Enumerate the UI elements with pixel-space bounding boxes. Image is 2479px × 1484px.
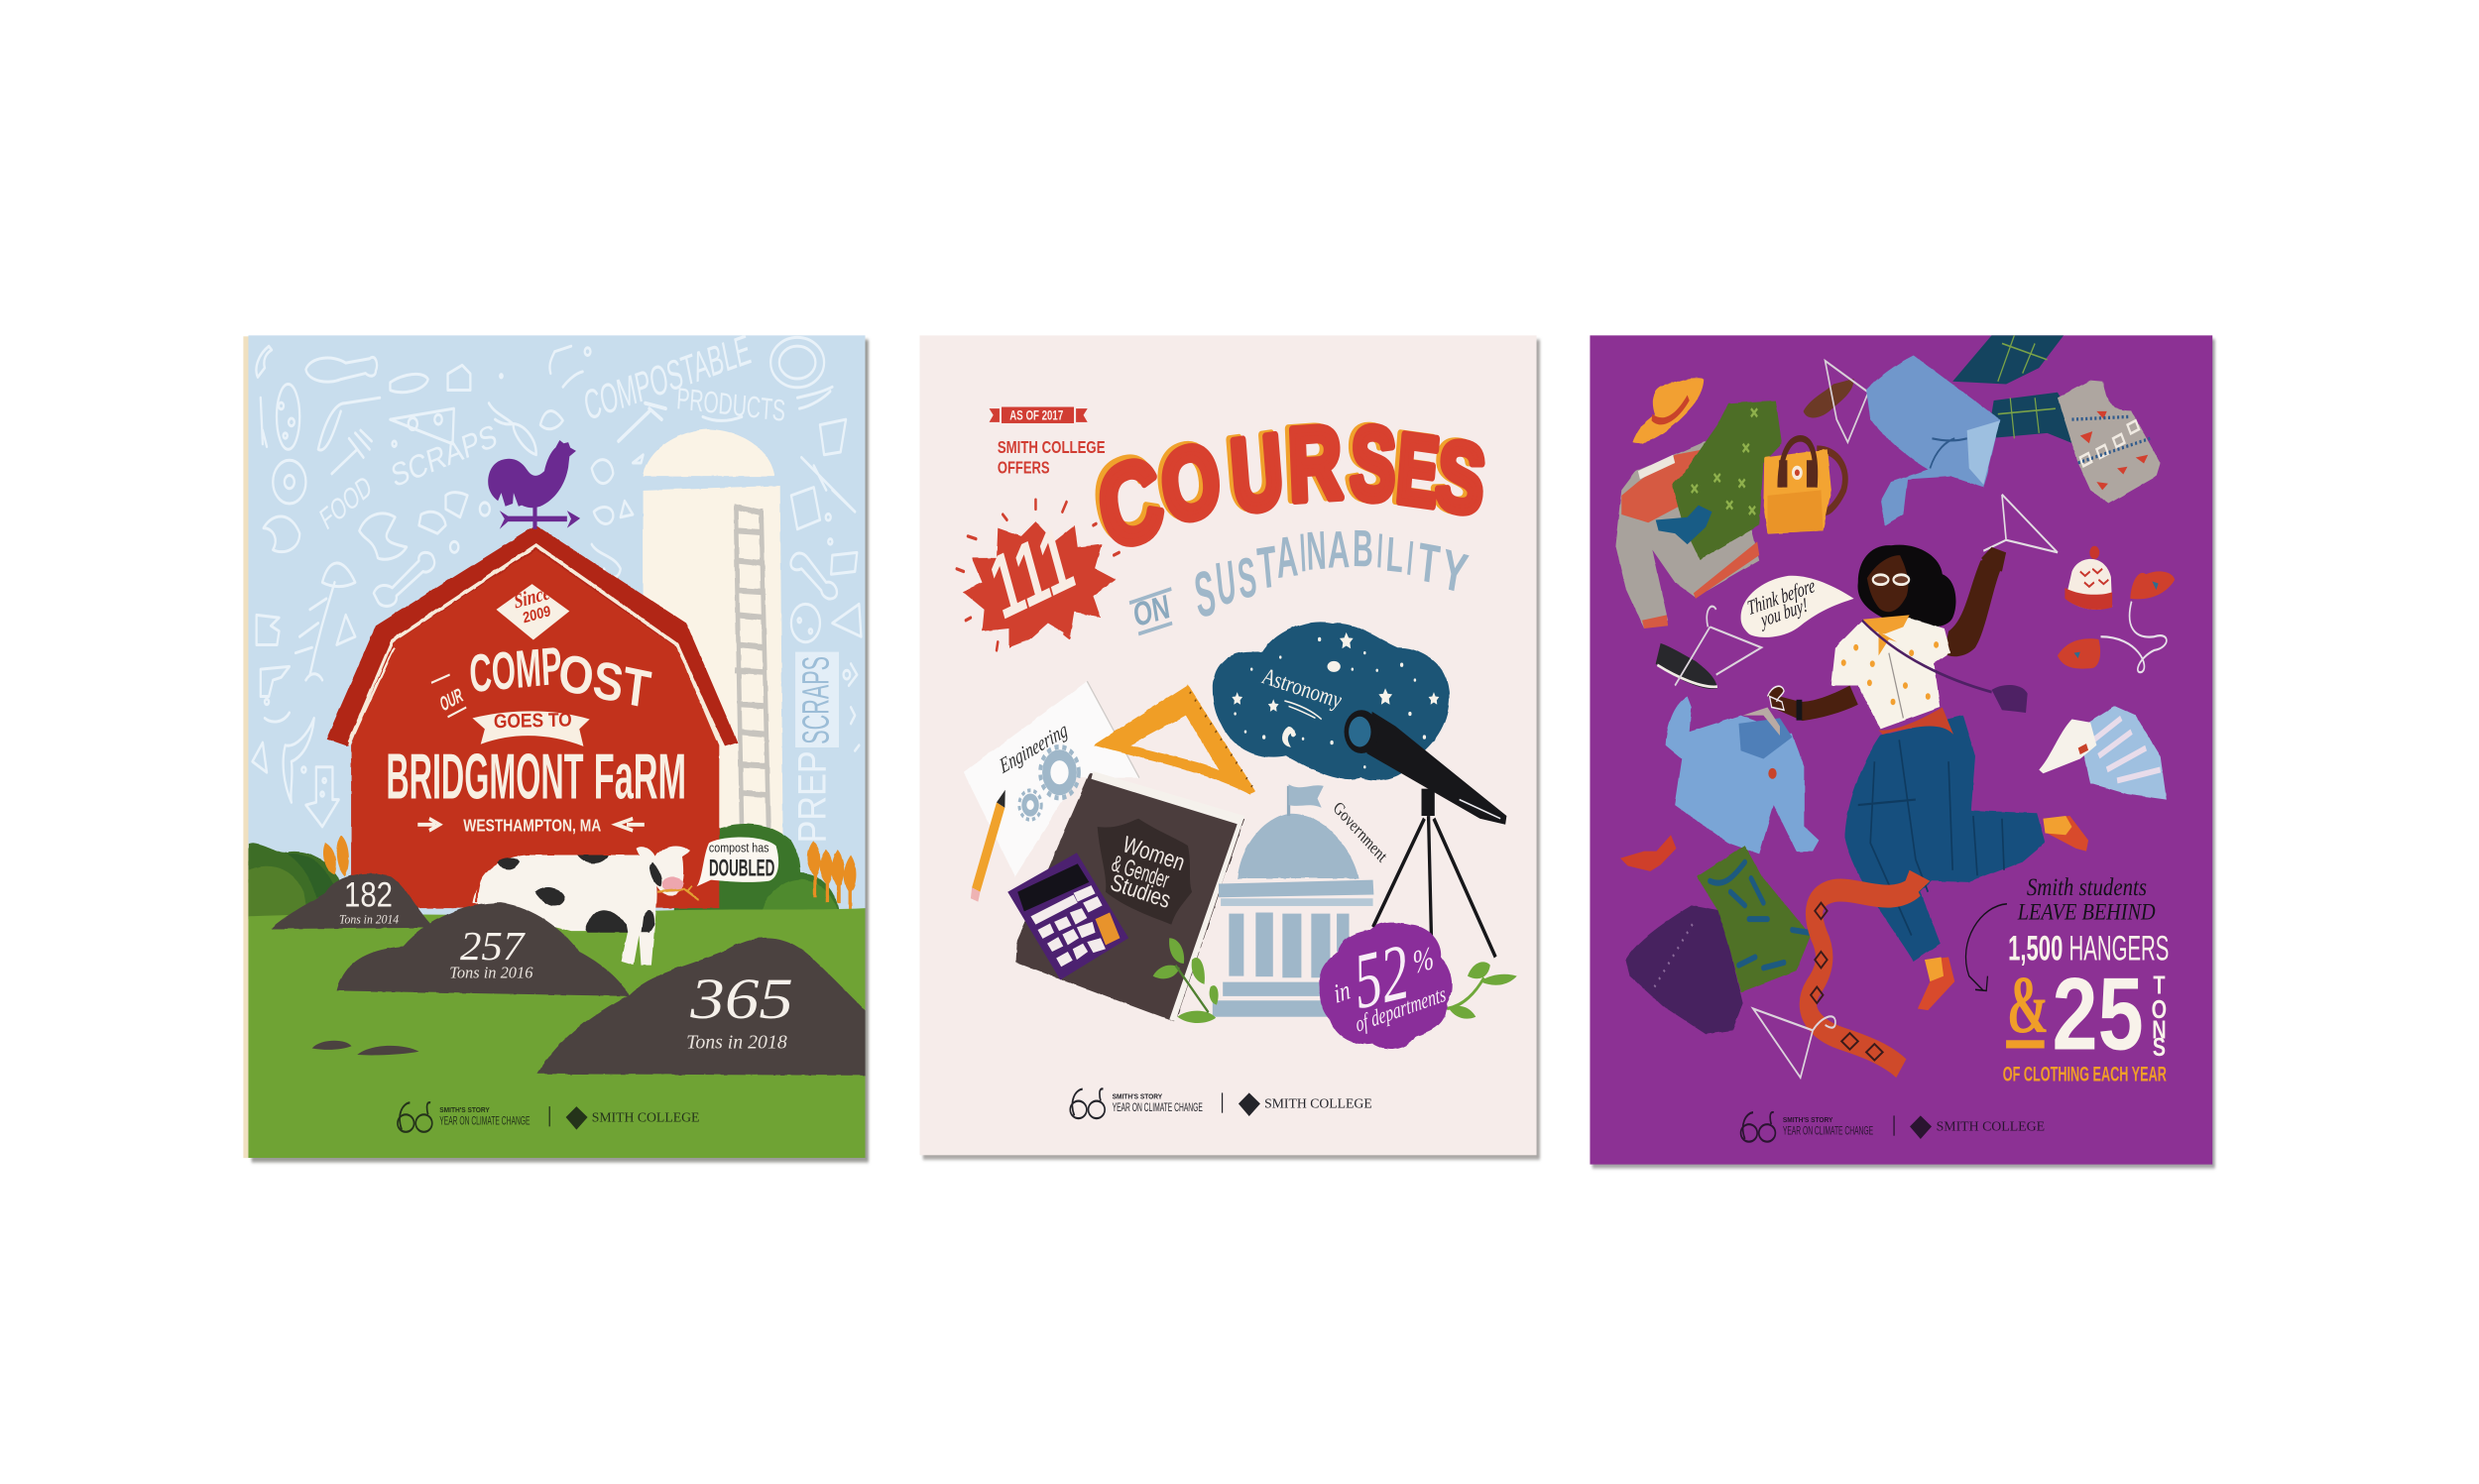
callout: compost has doubled: compost has [709, 841, 769, 856]
callout: compost has doubled: DOUBLED [709, 855, 774, 881]
title: courses: O [1150, 419, 1224, 544]
compost pile: 365 tons [312, 938, 868, 1076]
icon: women and gender studies book: Women [1121, 831, 1186, 876]
illustration: grey vest [2058, 381, 2161, 504]
figure: arms [1772, 555, 2004, 721]
speech bubble: think before you buy: you buy! [1758, 594, 1809, 631]
compost pile: 182 tons [271, 873, 434, 929]
figure: belt [1879, 707, 1953, 735]
sign: since 2009: Since [513, 581, 551, 613]
figure: legs and pants [1844, 716, 2046, 962]
icon: pencil [971, 790, 1005, 902]
illustration: night sky cloud with astronomy: Astronomy [1259, 661, 1344, 714]
title: courses: C [1089, 433, 1172, 575]
sign: since 2009 [496, 581, 569, 640]
compost pile: 182 tons: Tons in 2014 [339, 913, 400, 927]
compost pile: 257 tons: 257 [460, 923, 526, 969]
icon: women and gender studies book: Studies [1109, 868, 1172, 914]
title: courses: S [1432, 419, 1490, 536]
icon: rooster weather vane [488, 440, 580, 529]
title: our compost goes to bridgmont farm: COMP [468, 636, 563, 704]
figure: glasses [1873, 575, 1909, 585]
icon: telescope [1345, 710, 1506, 957]
poster triptych [243, 335, 2217, 1170]
title: on sustainability: I [1375, 523, 1384, 579]
statistic: and 25 tons: 25 [2053, 956, 2144, 1072]
illustration: orange hat [1632, 378, 1704, 443]
footer logos: SMITH'S STORY [1113, 1093, 1163, 1101]
label: scraps [795, 652, 839, 747]
text: smith college offers: SMITH COLLEGE [998, 438, 1106, 458]
title: on sustainability: Y [1437, 536, 1472, 606]
title: courses: R [1282, 402, 1340, 522]
title: courses: S [1349, 403, 1398, 523]
illustration: night sky cloud with astronomy [1213, 622, 1450, 780]
figure: shoes [1918, 816, 2088, 1010]
title: on sustainability: N [1305, 520, 1328, 582]
statistic: 1,500 hangers: 1,500 [2008, 929, 2063, 969]
text: of clothing each year: OF CLOTHING EACH YEAR [2003, 1062, 2167, 1085]
icon: women and gender studies book [1016, 771, 1244, 1022]
title: our compost goes to bridgmont farm [386, 636, 686, 836]
sign: since 2009: 2009 [522, 602, 552, 627]
figure: blouse [1831, 618, 1950, 729]
badge: in 52 percent of departments: % [1410, 941, 1436, 981]
illustration: green dress [1697, 846, 1811, 992]
badge: in 52 percent of departments: in [1332, 975, 1353, 1010]
illustration: orange backpack [1763, 438, 1845, 533]
text: smith college offers: OFFERS [998, 459, 1050, 478]
title: courses: E [1389, 412, 1439, 526]
compost pile: 182 tons: 182 [344, 875, 393, 914]
title: our compost goes to bridgmont farm: OUR [437, 683, 465, 716]
title: on sustainability: U [1213, 547, 1239, 619]
footer logos: SMITH'S STORY [439, 1106, 491, 1114]
illustration: government capitol: Government [1331, 796, 1391, 867]
ribbon: as of 2017 [990, 407, 1088, 423]
title: courses: U [1223, 410, 1283, 533]
footer logos: YEAR ON CLIMATE CHANGE [439, 1116, 531, 1128]
statistic: and 25 tons: N [2152, 1015, 2167, 1044]
illustration: left bushes and wheat [248, 824, 856, 919]
title: our compost goes to bridgmont farm: WESTHAMPTON, MA [463, 817, 601, 836]
footer logos [1070, 1088, 1372, 1118]
text: smith students leave behind: LEAVE BEHIND [2017, 900, 2156, 925]
ground [248, 908, 866, 1158]
illustration: black shoe with hanger [1656, 607, 1761, 689]
statistic: and 25 tons: & [2007, 960, 2049, 1050]
illustration: red mittens [2058, 571, 2175, 672]
badge: 111 starburst: 111 [981, 508, 1083, 639]
badge: in 52 percent of departments: of departments [1354, 982, 1448, 1037]
title: our compost goes to bridgmont farm: BRIDGMONT [386, 742, 583, 813]
icon: calculator [1007, 853, 1128, 979]
title: courses: O [1154, 421, 1228, 546]
figure: bracelet [1797, 700, 1802, 721]
text: smith college offers [998, 441, 1105, 474]
footer logos: SMITH COLLEGE [1937, 1119, 2045, 1134]
badge: in 52 percent of departments [1319, 922, 1452, 1049]
title: courses: S [1344, 402, 1394, 522]
title: courses: C [1085, 430, 1168, 571]
badge: in 52 percent of departments: 52 [1350, 928, 1414, 1026]
panel: compost poster [243, 326, 869, 1163]
illustration: government capitol [1213, 784, 1391, 1017]
compost pile: 257 tons: Tons in 2016 [449, 965, 533, 982]
title: our compost goes to bridgmont farm: FaRM [594, 742, 686, 813]
footer logos [398, 1102, 699, 1132]
doodle lettering: compostable products [315, 326, 834, 843]
title: courses: U [1227, 411, 1287, 534]
illustration: green sweater [1672, 400, 1782, 559]
leaves: sprouts [1153, 938, 1517, 1023]
illustration: cow [472, 846, 699, 966]
title: on sustainability: A [1327, 520, 1350, 579]
doodle lettering: compostable products: SCRAPS [388, 418, 500, 495]
illustration: red sock [1620, 835, 1676, 871]
title: courses [1095, 422, 1485, 547]
title: on sustainability: B [1353, 519, 1373, 578]
illustration: silo [644, 429, 783, 849]
title: on sustainability: S [1191, 557, 1220, 632]
footer logos: SMITH COLLEGE [1264, 1096, 1372, 1111]
title: on sustainability: I [1405, 531, 1416, 586]
speech bubble: think before you buy: Think before [1745, 574, 1817, 620]
icon: women and gender studies book: & Gender [1110, 850, 1171, 894]
title: on sustainability [1129, 519, 1472, 634]
title: on sustainability: I [1298, 523, 1307, 584]
figure: crossbody bag [1862, 621, 1992, 692]
arrow [1965, 904, 2007, 990]
statistic: 1,500 hangers: HANGERS [2069, 929, 2169, 969]
illustration: engineering paper and gears [964, 681, 1139, 876]
ribbon: as of 2017: AS OF 2017 [1009, 407, 1063, 423]
statistic: and 25 tons: S [2153, 1032, 2166, 1062]
title: our compost goes to bridgmont farm: OST [555, 643, 653, 721]
illustration: fair isle sweater [1615, 436, 1759, 628]
hanger held by woman [1983, 495, 2058, 552]
speech bubble: think before you buy [1741, 574, 1854, 637]
illustration: blue top [1866, 355, 2000, 525]
illustration: denim jacket [1666, 686, 1819, 854]
figure: hair [1858, 545, 1955, 628]
title: courses: S [1428, 417, 1485, 535]
panel: clothing poster [1590, 335, 2215, 1169]
footer logos: YEAR ON CLIMATE CHANGE [1783, 1126, 1873, 1138]
figure: socks [1925, 816, 2071, 981]
hanger [1753, 1008, 1835, 1078]
footer logos: SMITH COLLEGE [592, 1110, 699, 1125]
title: our compost goes to bridgmont farm: GOES TO [494, 708, 572, 733]
illustration: white sneaker and striped shirt [2039, 706, 2167, 800]
doodle lettering: compostable products: FOOD [315, 468, 376, 536]
icon: set square [1094, 684, 1255, 794]
title: courses: E [1393, 413, 1443, 527]
illustration: orange scarf [1808, 870, 1930, 1069]
illustration: woman [1772, 545, 2088, 1010]
illustration: engineering paper and gears: Engineering [997, 719, 1071, 779]
statistic: and 25 tons: T [2153, 970, 2165, 999]
illustration: brown shoe [1804, 379, 1854, 417]
compost pile: 365 tons: Tons in 2018 [686, 1030, 787, 1053]
illustration: red barn [326, 525, 738, 908]
hanger [1826, 361, 1868, 442]
figure: fist [1981, 547, 2006, 572]
compost pile: 365 tons: 365 [689, 968, 793, 1031]
illustration: purple shirt [1625, 905, 1743, 1034]
statistic: and 25 tons: O [2152, 994, 2167, 1023]
doodle lettering: compostable products: PREP [789, 750, 834, 843]
footer logos: SMITH'S STORY [1783, 1116, 1833, 1124]
statistic: 1,500 hangers [2008, 929, 2169, 969]
text: smith students leave behind [2017, 872, 2156, 925]
footer logos [1741, 1112, 2045, 1142]
illustration: white red beanie [2065, 546, 2112, 610]
footer logos: YEAR ON CLIMATE CHANGE [1113, 1102, 1203, 1114]
text: smith students leave behind: Smith students [2027, 872, 2147, 901]
doodle lettering: compostable products: COMPOSTABLE [580, 326, 755, 430]
title: on sustainability: S [1235, 544, 1259, 611]
title: on sustainability: L [1384, 527, 1405, 584]
doodle fork [619, 403, 665, 441]
title: on sustainability: T [1255, 534, 1280, 602]
title: courses: R [1286, 403, 1345, 523]
doodle lettering: compostable products: PRODUCTS [675, 381, 786, 428]
panel: compost poster: SCRAPS [795, 656, 837, 744]
panel: courses poster [919, 335, 1540, 1160]
doodles: food scraps background [253, 337, 861, 827]
illustration: teal pants [1952, 335, 2078, 444]
illustration: blue sock [1656, 506, 1712, 544]
title: on sustainability: T [1415, 532, 1443, 596]
callout: compost has doubled [697, 838, 778, 886]
title: on sustainability: A [1273, 522, 1300, 590]
figure: face [1867, 555, 1908, 612]
compost pile: 257 tons [337, 903, 630, 996]
statistic: and 25 tons [2006, 956, 2167, 1072]
title: on sustainability: ON [1131, 589, 1172, 634]
